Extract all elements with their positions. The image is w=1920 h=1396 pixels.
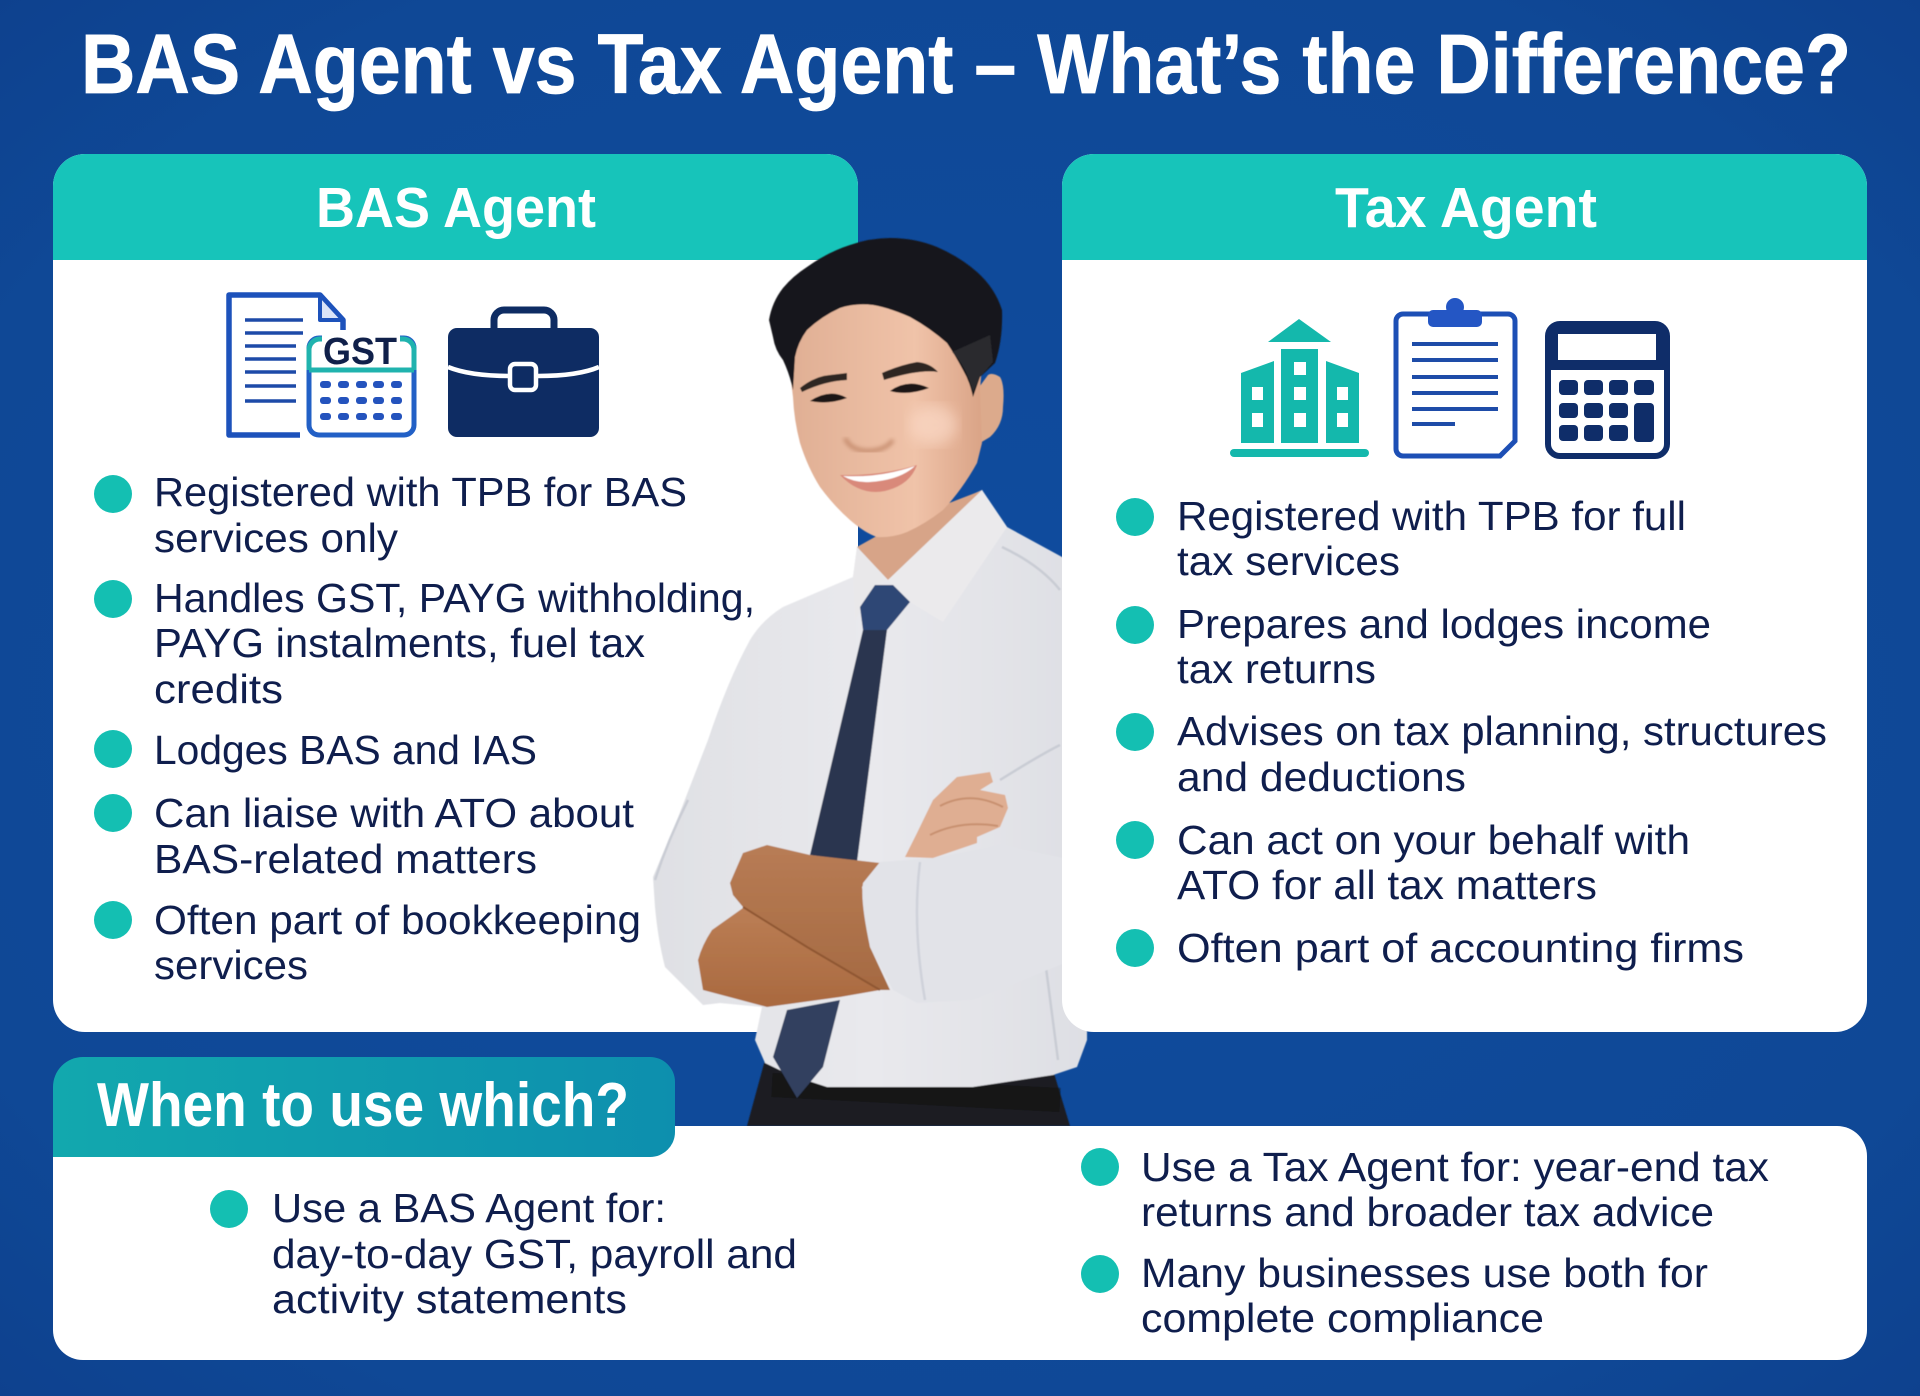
bullet list: Tax Agent: Advises on tax planning, structures — [1177, 708, 1827, 754]
text block: use a Tax Agent: Many businesses use both for — [1141, 1250, 1708, 1296]
heading tab: When to use which?: When to use which? — [97, 1071, 629, 1140]
bullet list: BAS Agent: BAS-related matters — [154, 836, 537, 882]
panel: When to use which — [53, 1057, 1867, 1360]
icon: briefcase — [448, 310, 599, 437]
bullet list: Tax Agent: Often part of accounting firms — [1177, 925, 1744, 971]
bullet list: BAS Agent: Can liaise with ATO about — [154, 790, 635, 836]
bullet list: Tax Agent: and deductions — [1177, 754, 1466, 800]
bullet list: Tax Agent: tax returns — [1177, 646, 1376, 692]
bullet list: Tax Agent: tax services — [1177, 538, 1400, 584]
bullet list: Tax Agent: Prepares and lodges income — [1177, 601, 1711, 647]
text block: use a BAS Agent: day-to-day GST, payroll and — [272, 1231, 797, 1277]
heading: Tax Agent: Tax Agent — [1335, 176, 1597, 240]
bullet list: BAS Agent — [94, 469, 755, 988]
bullet list: BAS Agent: Lodges BAS and IAS — [154, 727, 537, 773]
panel: Tax Agent — [1062, 154, 1867, 1032]
text block: use a BAS Agent — [210, 1185, 797, 1322]
bullet list: BAS Agent: Registered with TPB for BAS — [154, 469, 687, 515]
icon: building — [1230, 319, 1369, 457]
icon: document with GST calendar — [229, 295, 414, 435]
bullet list: Tax Agent: ATO for all tax matters — [1177, 862, 1597, 908]
person: smiling man with crossed arms — [653, 238, 1087, 1126]
icon: document with GST calendar: GST — [323, 331, 397, 373]
text block: use a Tax Agent: returns and broader tax advice — [1141, 1189, 1714, 1235]
bullet list: BAS Agent: services only — [154, 515, 399, 561]
icon: clipboard — [1396, 300, 1515, 456]
text block: use a BAS Agent: activity statements — [272, 1276, 627, 1322]
panel header: Tax Agent — [1062, 154, 1867, 260]
panel header: BAS Agent — [53, 154, 858, 260]
bullet list: BAS Agent: Often part of bookkeeping — [154, 897, 641, 943]
bullet list: Tax Agent: Can act on your behalf with — [1177, 817, 1690, 863]
text block: use a Tax Agent — [1081, 1144, 1770, 1341]
icon: calculator — [1546, 322, 1668, 456]
bullet list: Tax Agent: Registered with TPB for full — [1177, 493, 1686, 539]
text block: use a Tax Agent: Use a Tax Agent for: year-end tax — [1141, 1144, 1770, 1190]
bullet list: BAS Agent: credits — [154, 666, 283, 712]
heading tab: When to use which? — [53, 1057, 675, 1157]
panel: BAS Agent — [53, 154, 858, 1032]
bullet list: Tax Agent — [1116, 493, 1827, 971]
bullet list: BAS Agent: Handles GST, PAYG withholding, — [154, 575, 755, 621]
text block: use a Tax Agent: complete compliance — [1141, 1295, 1544, 1341]
bullet list: BAS Agent: PAYG instalments, fuel tax — [154, 620, 646, 666]
bullet list: BAS Agent: services — [154, 942, 308, 988]
text block: use a BAS Agent: Use a BAS Agent for: — [272, 1185, 666, 1231]
heading: BAS Agent: BAS Agent — [316, 176, 596, 240]
